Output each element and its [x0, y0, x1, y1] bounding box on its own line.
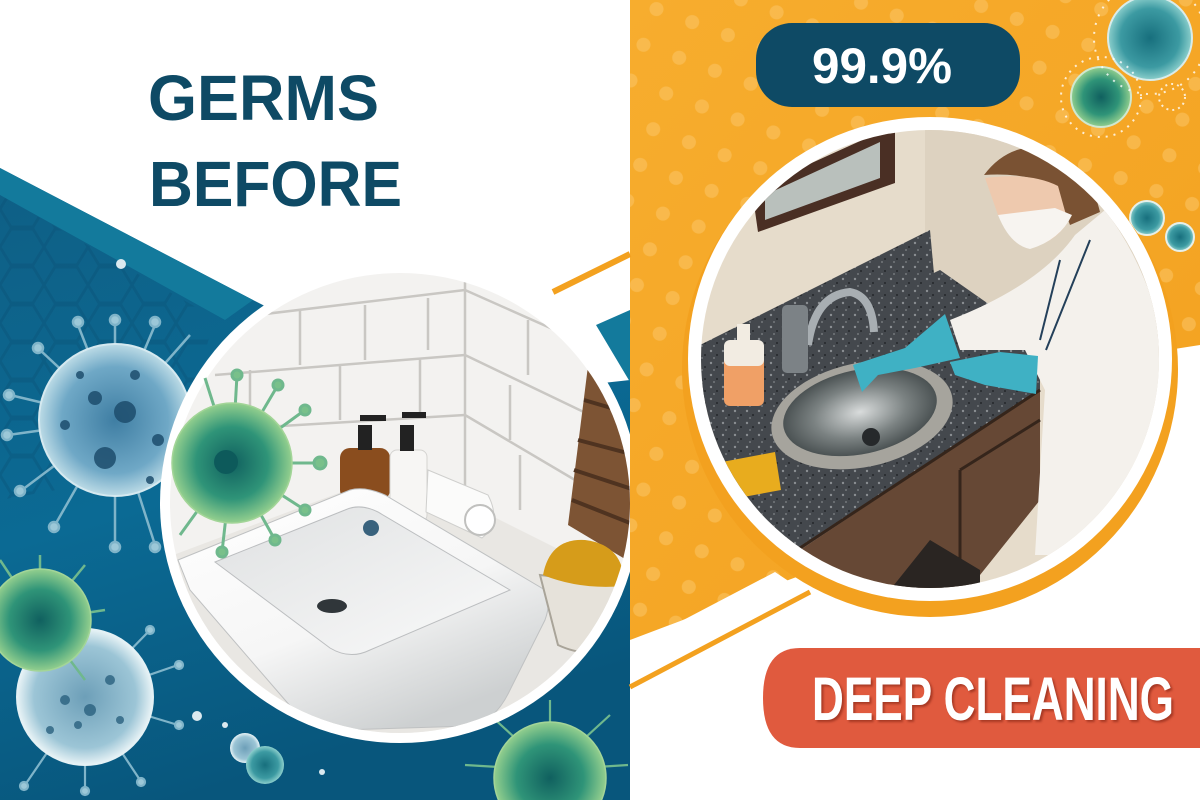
germ: green virus bottom — [465, 700, 628, 800]
germ: large blue virus — [2, 315, 191, 552]
germ: pale blue virus lower left — [17, 610, 183, 795]
tile wall — [215, 282, 582, 510]
cabinet — [800, 390, 1040, 600]
counter — [176, 492, 575, 733]
wooden blind — [568, 370, 630, 558]
steel sink — [771, 362, 953, 470]
banner: deep cleaning — [763, 648, 1200, 748]
small white dots — [116, 259, 325, 775]
white bottle — [390, 412, 427, 522]
yellow sponge — [722, 452, 781, 498]
wicker basket with yellow cloth — [540, 540, 625, 652]
soap bottle — [724, 324, 764, 406]
germs: top right — [1061, 0, 1200, 251]
backsplash — [700, 230, 935, 400]
photo: dirty white sink — [160, 260, 640, 760]
title: germs before: GERMS — [148, 62, 379, 134]
title: germs before — [148, 62, 402, 220]
rolled towel — [426, 470, 495, 538]
left panel: blue background — [0, 168, 630, 800]
cleaner uniform — [950, 210, 1165, 555]
white basin — [178, 489, 548, 730]
badge: 99.9%: 99.9% — [812, 38, 952, 94]
decorative orange stripes — [553, 254, 810, 687]
mirror — [752, 132, 895, 232]
badge: 99.9% — [756, 23, 1020, 107]
photo: deep cleaning sink — [682, 117, 1178, 617]
faucet — [782, 292, 874, 373]
title: germs before: BEFORE — [149, 148, 402, 220]
right panel: orange background — [630, 0, 1200, 640]
amber bottle — [340, 415, 390, 500]
cleaner head — [984, 147, 1100, 249]
germ: tiny viruses bottom — [230, 733, 284, 784]
granite counter — [700, 270, 1040, 550]
blue gloves — [853, 314, 1038, 394]
germ: green virus on photo — [172, 370, 326, 557]
germ: small green virus lower left — [0, 555, 105, 680]
